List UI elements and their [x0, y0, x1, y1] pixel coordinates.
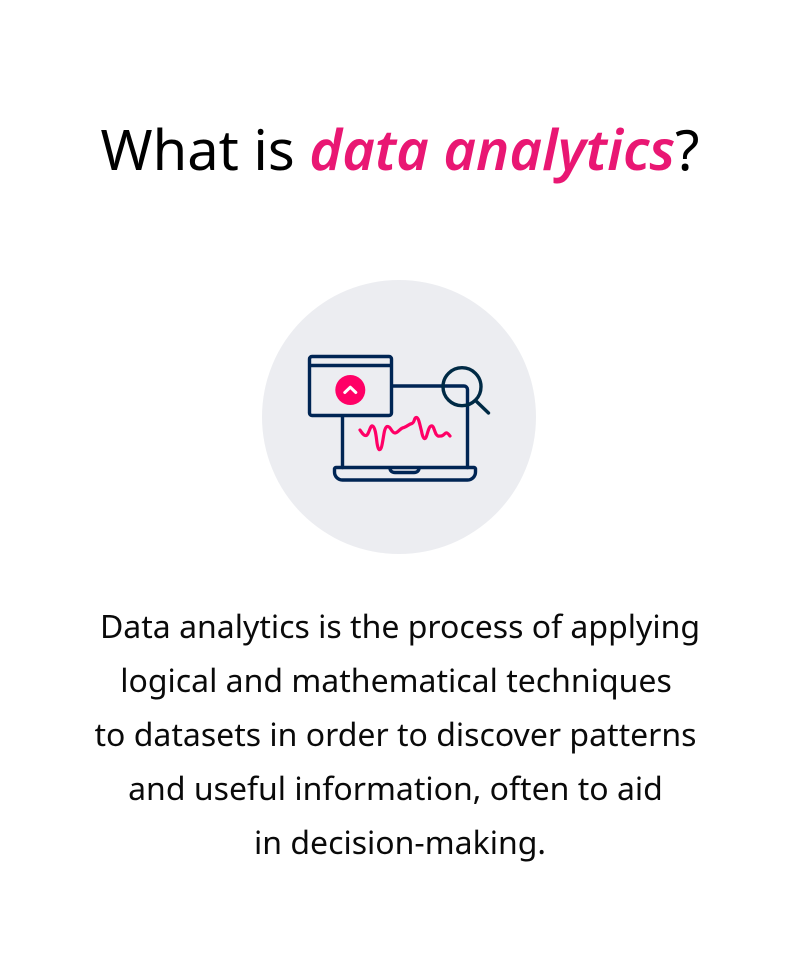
icon: browser window: [310, 356, 392, 416]
body text: to datasets in order to discover patterns: [94, 713, 697, 756]
body text: [94, 605, 700, 864]
icon: up chevron button: [335, 375, 365, 405]
body text: in decision-making.: [254, 821, 546, 864]
icon: pink data wave: [360, 417, 450, 450]
icon background circle: [262, 280, 536, 554]
icon: laptop: [334, 386, 476, 480]
body text: and useful information, often to aid: [128, 767, 663, 810]
icon: magnifying glass: [443, 368, 488, 413]
icon: data analytics illustration: [262, 280, 536, 554]
title: What is data analytics?: [101, 111, 699, 187]
body text: Data analytics is the process of applying: [100, 605, 700, 648]
body text: logical and mathematical techniques: [120, 659, 672, 702]
